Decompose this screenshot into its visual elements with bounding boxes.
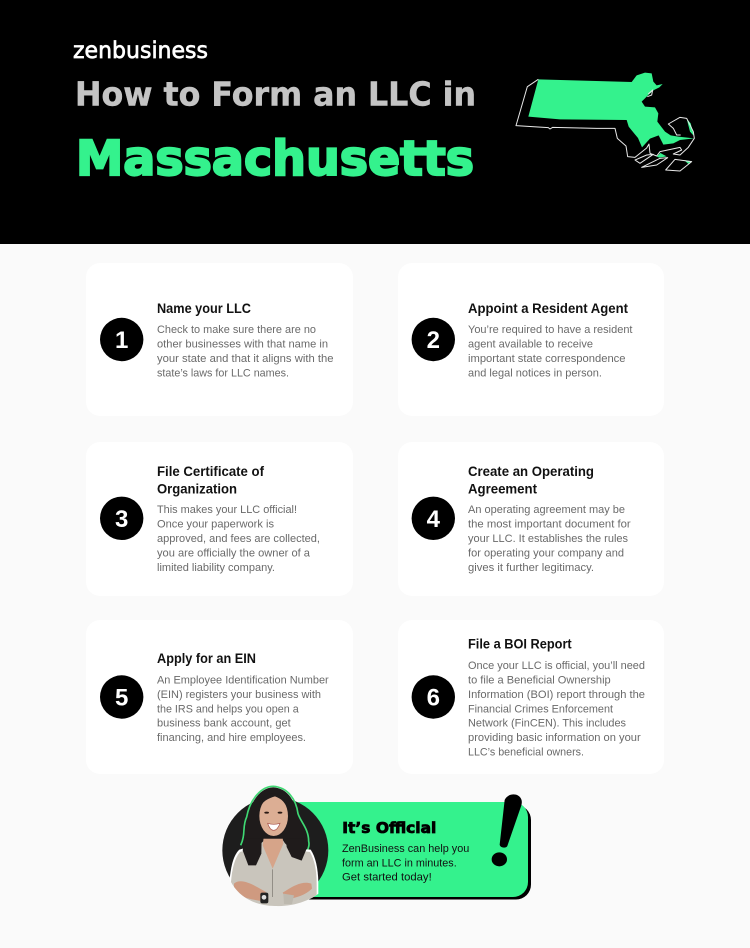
banner shadow — [285, 805, 531, 900]
number badge 5: 5 — [115, 684, 128, 712]
panel: step 1 — [86, 263, 353, 416]
body text: step 6 — [468, 660, 645, 759]
body text: step 4: your LLC. It establishes the rules — [468, 533, 628, 545]
body text: step 2 — [468, 324, 632, 380]
body text: step 4: the most important document for — [468, 519, 631, 531]
body text: step 4: for operating your company and — [468, 548, 624, 560]
heading: Appoint a Resident Agent: Appoint a Resident Agent — [468, 301, 628, 316]
body text: step 6: Network (FinCEN). This includes — [468, 718, 626, 730]
number badge 4: 4 — [427, 506, 441, 533]
body text: step 3: This makes your LLC official! — [157, 504, 297, 516]
panel: step 3 — [86, 442, 353, 596]
panel: step 5 — [86, 620, 353, 774]
body text: step 4 — [468, 504, 631, 574]
body text: step 6: to file a Beneficial Ownership — [468, 674, 611, 686]
body text: step 5: the IRS and helps you open a — [157, 703, 300, 715]
body text: step 6: Once your LLC is official, you’ll need — [468, 660, 645, 672]
body text: call to action — [342, 843, 469, 884]
body text: step 5: (EIN) registers your business with — [157, 689, 321, 701]
body text: step 3: you are officially the owner of a — [157, 548, 311, 560]
panel: step 4 — [398, 442, 664, 596]
number badge 5 — [100, 675, 143, 719]
neck — [262, 838, 284, 868]
left lock of hair over shirt — [242, 842, 262, 866]
smile — [268, 823, 280, 830]
heading: Create an Operating Agreement: Create an Operating — [468, 464, 594, 479]
heading: It's Official: It’s Official — [342, 819, 436, 837]
panel: black header — [0, 0, 750, 244]
number badge 1: 1 — [115, 327, 128, 354]
heading: Create an Operating Agreement — [468, 464, 594, 496]
body text: step 6: Information (BOI) report through the — [468, 689, 645, 701]
body text: step 1: state’s laws for LLC names. — [157, 368, 289, 380]
map: Massachusetts — [516, 73, 694, 171]
heading: Apply for an EIN: Apply for an EIN — [157, 651, 256, 666]
body text: step 2: important state correspondence — [468, 353, 626, 365]
hair — [242, 787, 308, 866]
panel: step 2 — [398, 263, 664, 416]
heading: File Certificate of Organization — [157, 464, 264, 496]
body text: step 3: approved, and fees are collected, — [157, 533, 320, 545]
eyes — [264, 812, 269, 814]
hair glow — [241, 786, 309, 854]
title line: How to Form an LLC in: How to Form an LLC in — [75, 76, 476, 114]
heading: File Certificate of Organization: File Certificate of — [157, 464, 264, 479]
number badge 6: 6 — [427, 684, 440, 712]
face — [259, 796, 288, 836]
panel: step 6 — [398, 620, 664, 774]
body text: step 1: your state and that it aligns with the — [157, 353, 334, 365]
body text: step 1: Check to make sure there are no — [157, 324, 316, 336]
watch — [260, 893, 268, 903]
body text: step 3 — [157, 504, 320, 574]
body text: step 1: other businesses with that name in — [157, 338, 328, 350]
number badge 3 — [100, 497, 143, 540]
body text: step 2: You’re required to have a resident — [468, 324, 632, 336]
body text: step 4: gives it further legitimacy. — [468, 562, 594, 574]
panel: call to action — [222, 786, 531, 910]
number badge 3: 3 — [115, 506, 128, 533]
logo: zenbusiness: zenbusiness — [73, 36, 208, 64]
shirt — [230, 838, 318, 906]
heading: Name your LLC: Name your LLC — [157, 301, 251, 316]
number badge 1 — [100, 318, 143, 361]
body text: step 5 — [157, 674, 329, 744]
body text: step 2: agent available to receive — [468, 338, 593, 350]
body text: call to action: ZenBusiness can help you — [342, 843, 469, 855]
body text: step 1 — [157, 324, 334, 380]
body text: step 2: and legal notices in person. — [468, 368, 602, 380]
heading: File Certificate of Organization: Organization — [157, 482, 237, 496]
body text: call to action: form an LLC in minutes. — [342, 857, 457, 869]
body text: step 3: Once your paperwork is — [157, 519, 274, 531]
forearms — [234, 881, 266, 901]
hairline — [259, 793, 289, 810]
number badge 6 — [412, 675, 455, 719]
body text: step 6: providing basic information on your — [468, 732, 641, 744]
body text: step 4: An operating agreement may be — [468, 504, 625, 516]
body text: call to action: Get started today! — [342, 872, 432, 884]
green banner — [285, 802, 528, 897]
title line: Massachusetts: Massachusetts — [76, 131, 474, 187]
body text: step 6: LLC’s beneficial owners. — [468, 747, 584, 759]
body text: step 3: limited liability company. — [157, 562, 275, 574]
body text: step 5: financing, and hire employees. — [157, 732, 306, 744]
heading: File a BOI Report: File a BOI Report — [468, 637, 572, 652]
number badge 2: 2 — [427, 327, 440, 354]
heading: Create an Operating Agreement: Agreement — [468, 482, 537, 496]
number badge 2 — [412, 318, 455, 361]
number badge 4 — [412, 497, 455, 540]
icon: exclamation mark — [492, 794, 522, 866]
body text: step 6: Financial Crimes Enforcement — [468, 703, 613, 715]
photo: smiling businesswoman in circle — [222, 786, 328, 910]
body text: step 5: business bank account, get — [157, 718, 291, 730]
body text: step 5: An Employee Identification Number — [157, 674, 329, 686]
